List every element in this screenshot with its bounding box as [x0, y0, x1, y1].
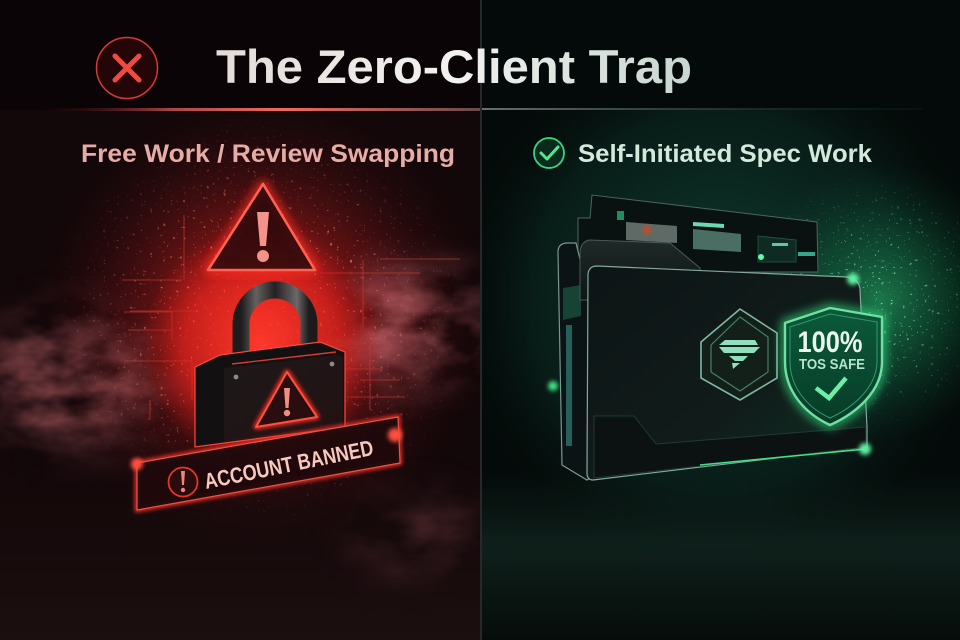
- folder strap: [563, 285, 581, 320]
- icon: tos safe shield: 100%: [798, 326, 862, 359]
- illustration: portfolio folder: [548, 195, 882, 480]
- folder spine: [558, 243, 590, 480]
- icon: alert circle: [168, 468, 198, 496]
- panel: spec work background: [482, 110, 960, 634]
- icon: tos safe shield: [785, 308, 882, 425]
- heading: free work: Free Work / Review Swapping: [81, 140, 455, 168]
- folder light flares: [548, 273, 871, 455]
- icon: warning triangle: [208, 184, 315, 270]
- icon: green check badge: [534, 138, 564, 168]
- folder front: [587, 266, 867, 480]
- icon: padlock: [195, 290, 345, 447]
- banner: account banned: ACCOUNT BANNED: [202, 435, 376, 494]
- folder pocket: [594, 416, 866, 478]
- illustration: warning and lock: [131, 184, 402, 510]
- icon: lock warning triangle: [256, 372, 317, 427]
- icon: hexagon emblem: [701, 309, 777, 400]
- folder side lights: [566, 325, 572, 446]
- folder back tab: [580, 240, 700, 300]
- icon: tos safe shield: TOS SAFE: [799, 356, 865, 373]
- header divider: [40, 108, 922, 111]
- center divider: [480, 0, 482, 640]
- title: The Zero-Client Trap: [216, 40, 692, 93]
- banner: account banned: [131, 417, 402, 510]
- icon: red x badge: [96, 37, 158, 99]
- heading: spec work: Self-Initiated Spec Work: [578, 140, 872, 168]
- panel: free work background: [0, 110, 480, 640]
- folder edge glow: [700, 449, 866, 465]
- screen: portfolio preview: [578, 195, 818, 272]
